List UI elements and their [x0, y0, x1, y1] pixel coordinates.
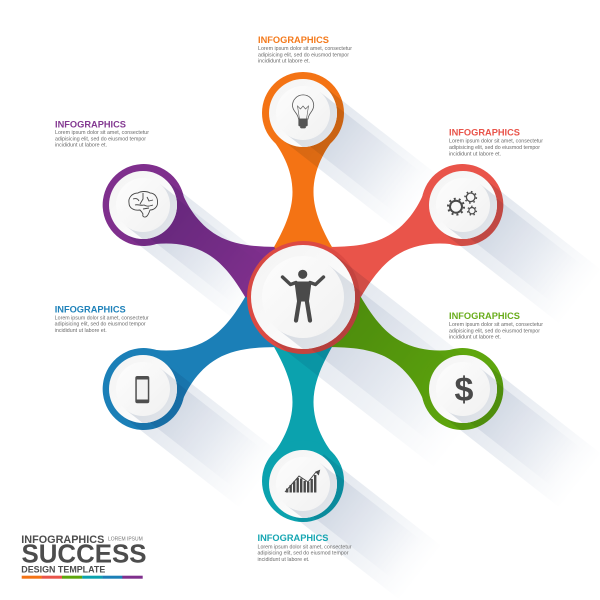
text block: purple: INFOGRAPHICS	[55, 118, 126, 130]
text block: teal: Lorem ipsum dolor sit amet, consectetur	[258, 544, 352, 550]
text block: red: Lorem ipsum dolor sit amet, consectetur	[449, 139, 543, 145]
petal: orange (top)	[262, 72, 344, 297]
text block: green: Lorem ipsum dolor sit amet, consectetur	[449, 322, 543, 328]
petal: blue (lower left)	[88, 261, 324, 445]
text block: green: incididunt ut labore et.	[449, 335, 501, 341]
text block: teal: INFOGRAPHICS	[258, 532, 328, 543]
node disc: top	[269, 79, 337, 147]
icon: light bulb	[292, 95, 314, 128]
text block: purple	[55, 118, 149, 149]
text block: green: adipisicing elit, sed do eiusmod tempor	[449, 328, 540, 334]
text block: red: INFOGRAPHICS	[449, 127, 520, 138]
text block: purple: Lorem ipsum dolor sit amet, consectetur	[55, 130, 149, 136]
text block: orange: INFOGRAPHICS	[258, 34, 329, 45]
node disc: upper right	[429, 171, 497, 239]
text block: orange: adipisicing elit, sed do eiusmod tempor	[258, 52, 349, 58]
text block: teal: adipisicing elit, sed do eiusmod tempor	[258, 551, 349, 557]
node disc: upper left	[109, 171, 177, 239]
text block: green: INFOGRAPHICS	[449, 310, 520, 321]
title block: INFOGRAPHICS	[21, 534, 104, 546]
title block: DESIGN TEMPLATE	[21, 565, 105, 576]
text block: orange: Lorem ipsum dolor sit amet, consectetur	[258, 46, 352, 52]
text block: teal	[258, 532, 352, 563]
text block: blue: adipisicing elit, sed do eiusmod tempor	[55, 322, 146, 328]
node disc: bottom	[269, 450, 337, 518]
node disc: lower right	[429, 355, 497, 423]
icon: gears	[448, 192, 476, 215]
text block: red: incididunt ut labore et.	[449, 151, 501, 157]
center hub ring	[247, 241, 360, 354]
icon: person with raised arms	[282, 270, 324, 320]
icon: dollar sign: $	[455, 371, 474, 409]
title block: SUCCESS	[22, 538, 146, 568]
text block: teal: incididunt ut labore et.	[258, 557, 310, 563]
text block: green	[449, 310, 543, 341]
petal: red (upper right)	[282, 149, 518, 333]
petal: green (lower right)	[282, 261, 518, 445]
icon: smartphone	[135, 376, 149, 403]
text block: purple: adipisicing elit, sed do eiusmod tempor	[55, 136, 146, 142]
text block: red: adipisicing elit, sed do eiusmod tempor	[449, 145, 540, 151]
text block: red	[449, 127, 543, 157]
long shadows	[122, 86, 600, 600]
icon: brain	[129, 192, 158, 217]
text block: orange: incididunt ut labore et.	[258, 59, 310, 65]
text block: blue	[55, 303, 149, 334]
icon: rising bar chart	[285, 470, 320, 492]
text block: purple: incididunt ut labore et.	[55, 143, 107, 149]
text block: blue: incididunt ut labore et.	[55, 328, 107, 334]
rainbow underline bar	[22, 576, 143, 579]
petal: teal (bottom)	[262, 297, 344, 522]
text block: blue: Lorem ipsum dolor sit amet, consectetur	[55, 315, 149, 321]
node disc: lower left	[109, 355, 177, 423]
petal: purple (upper left)	[88, 149, 324, 333]
text block: orange	[258, 34, 352, 65]
title block: LOREM IPSUM	[108, 537, 143, 543]
center hub disc	[251, 245, 355, 349]
text block: blue: INFOGRAPHICS	[55, 303, 126, 314]
